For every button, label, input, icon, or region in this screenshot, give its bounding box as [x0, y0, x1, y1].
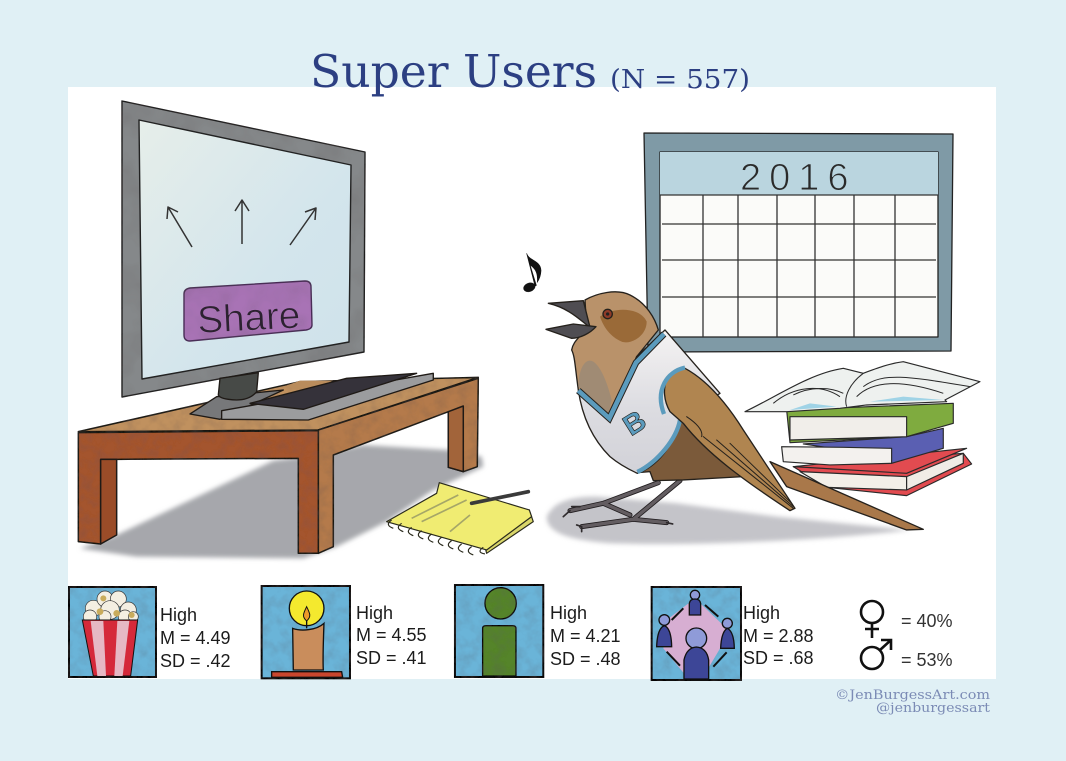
title: Super Users — [310, 45, 597, 98]
title: (N = 557) — [610, 65, 750, 95]
legs and feet — [570, 481, 680, 527]
white illustration panel — [68, 87, 996, 679]
bird in jersey — [546, 292, 923, 544]
icon: female symbol — [861, 601, 883, 638]
calendar grid — [660, 195, 938, 337]
stats: social network — [743, 603, 814, 668]
share button — [184, 281, 312, 341]
jersey trim — [578, 334, 664, 418]
music note — [522, 253, 541, 293]
stats: social network: High — [743, 603, 780, 623]
notepad and pencil — [387, 483, 533, 555]
stats: popcorn: SD = .42 — [160, 651, 231, 671]
illustration: desk with monitor — [78, 101, 533, 558]
icon: social network — [652, 587, 741, 680]
stats: social network: SD = .68 — [743, 648, 814, 668]
stack of books — [745, 362, 980, 496]
stats: popcorn: M = 4.49 — [160, 628, 231, 648]
artist credit: @jenburgessart — [876, 701, 991, 716]
arrows on screen — [167, 200, 316, 247]
jersey — [578, 330, 720, 473]
beak — [548, 301, 590, 327]
head and chest — [572, 292, 658, 417]
gender breakdown — [861, 601, 953, 670]
monitor: Share — [196, 295, 301, 342]
male percentage: = 53% — [901, 650, 953, 670]
stats: candle: SD = .41 — [356, 648, 427, 668]
stats: information: M = 4.21 — [550, 626, 621, 646]
icon: information — [455, 585, 543, 677]
stats: information: SD = .48 — [550, 649, 621, 669]
stats: candle — [356, 603, 427, 668]
monitor — [122, 101, 365, 397]
monitor stand and keyboard — [190, 373, 433, 420]
tail — [770, 462, 923, 530]
belly — [638, 420, 743, 481]
stats: information — [550, 603, 621, 669]
floor shadow — [547, 497, 910, 544]
artist credit — [835, 688, 991, 716]
table shadow on floor — [80, 445, 483, 558]
icon: male symbol — [861, 640, 891, 669]
illustration: wall calendar — [644, 133, 953, 352]
icon: candle — [262, 586, 350, 678]
female percentage: = 40% — [901, 611, 953, 631]
table — [78, 377, 478, 553]
jersey letter: B — [618, 404, 652, 443]
eye — [603, 309, 612, 319]
stats: social network: M = 2.88 — [743, 626, 814, 646]
calendar year: 2016 — [740, 157, 857, 199]
wing — [664, 368, 795, 511]
title — [310, 45, 750, 98]
stats: candle: M = 4.55 — [356, 625, 427, 645]
artist credit: ©JenBurgessArt.com — [835, 688, 990, 703]
stats: popcorn — [160, 605, 231, 671]
stats: popcorn: High — [160, 605, 197, 625]
face patch — [600, 310, 647, 342]
stats: information: High — [550, 603, 587, 623]
stats: candle: High — [356, 603, 393, 623]
icon: popcorn — [69, 587, 156, 677]
